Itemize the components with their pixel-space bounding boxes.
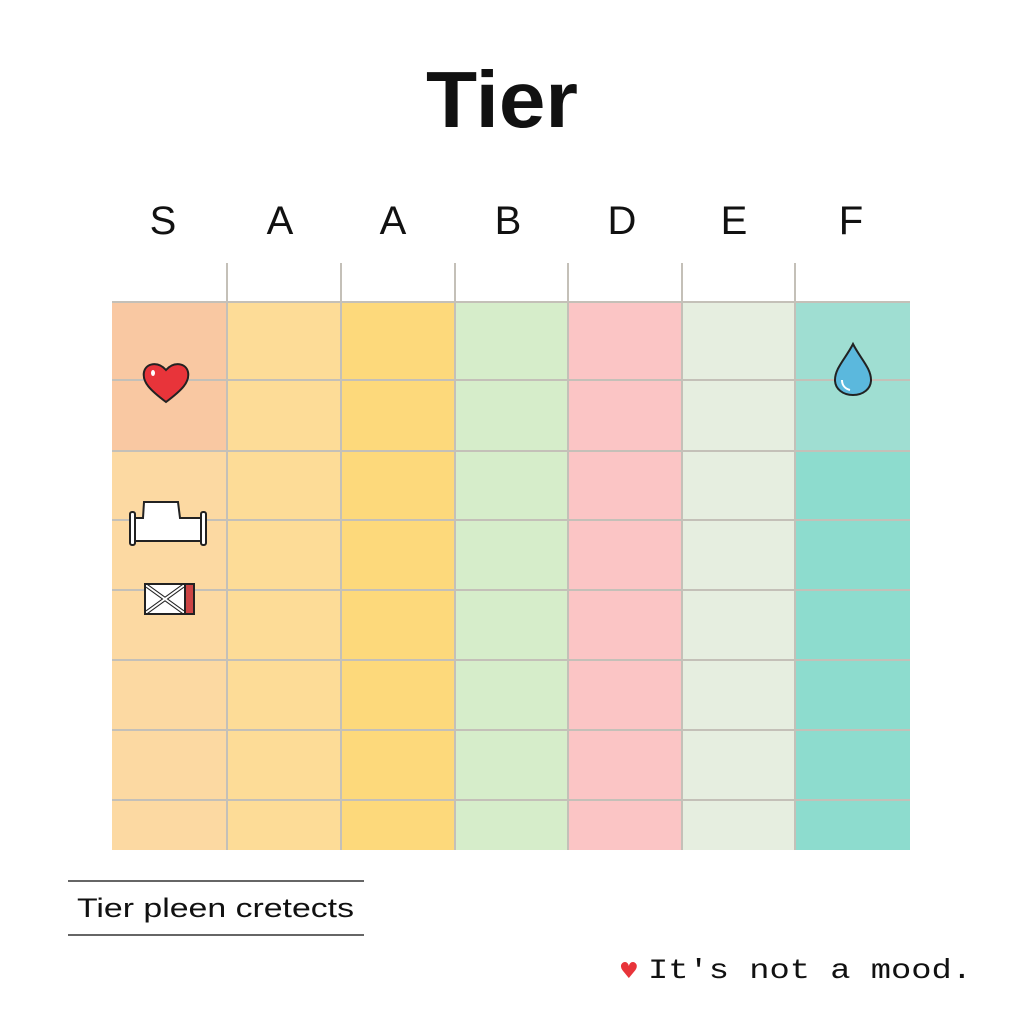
icon: water drop (835, 344, 871, 395)
icon: heart (144, 364, 188, 402)
column headers: S (150, 199, 176, 243)
tier grid (112, 263, 910, 850)
column headers: A (380, 199, 407, 243)
column headers: F (839, 199, 863, 243)
column headers: B (495, 199, 521, 243)
footer note: It's not a mood. (648, 956, 972, 987)
caption box: Tier pleen cretects (77, 893, 354, 923)
footer note: ♥ (619, 959, 639, 984)
icon: bed (130, 502, 206, 545)
icon: envelope (145, 584, 194, 614)
column headers (150, 199, 863, 243)
column headers: D (608, 199, 636, 243)
column headers: A (267, 199, 294, 243)
title: Tier (426, 55, 578, 144)
column headers: E (721, 199, 747, 243)
